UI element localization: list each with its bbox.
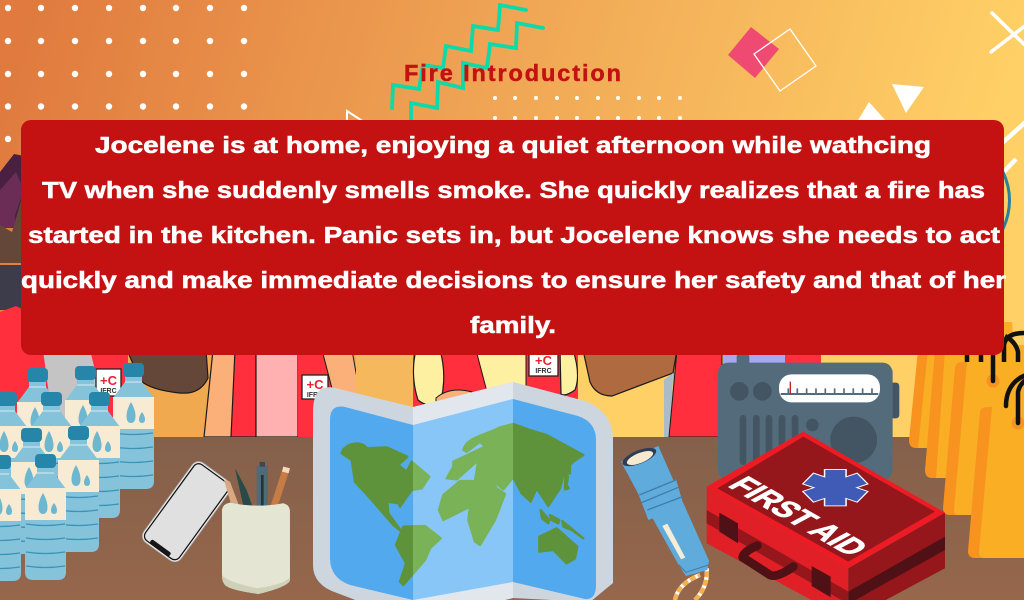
red vest xyxy=(231,350,256,437)
lavender phone xyxy=(723,350,785,364)
red cross tag two: +C xyxy=(307,377,324,392)
grey sliver xyxy=(664,373,673,437)
character at left edge xyxy=(0,154,24,360)
red vest two xyxy=(298,350,345,437)
radio xyxy=(718,353,899,480)
red cross tag three: +C xyxy=(535,353,553,368)
shirt left xyxy=(0,350,128,440)
white cross and diagonals xyxy=(991,13,1024,176)
teal zigzag lines xyxy=(392,5,543,124)
brown sleeve xyxy=(583,350,677,396)
body text xyxy=(21,132,1006,338)
red cross tag three xyxy=(529,350,558,376)
grey pen xyxy=(257,466,268,513)
pink diamond shapes xyxy=(728,27,816,91)
dot grid top left xyxy=(5,5,247,142)
first aid label: FIRST AID xyxy=(720,473,875,561)
dark pen xyxy=(235,468,255,513)
orange shopping bags xyxy=(909,322,1024,558)
red cross tag two xyxy=(302,375,328,399)
red cross tag one: +C xyxy=(100,373,118,388)
water bottles xyxy=(0,363,154,581)
pencil cup xyxy=(222,462,290,594)
blonde hair and red shirt xyxy=(413,350,578,410)
smartphone xyxy=(139,459,234,565)
title: Fire Introduction xyxy=(404,60,621,86)
white triangles xyxy=(857,84,924,122)
body text: quickly and make immediate decisions to ensure her safety and that of her xyxy=(21,267,1006,293)
body text: started in the kitchen. Panic sets in, but Jocelene knows she needs to act xyxy=(28,222,1000,248)
body text: Jocelene is at home, enjoying a quiet afternoon while wathcing xyxy=(95,132,931,158)
red cross tag three: IFRC xyxy=(535,368,552,375)
dark skin arm xyxy=(127,350,208,393)
teal arc xyxy=(1003,172,1010,229)
peach arm two xyxy=(322,350,360,437)
red cross tag one xyxy=(96,369,121,396)
peach arm xyxy=(204,350,236,437)
body text: TV when she suddenly smells smoke. She quickly realizes that a fire has xyxy=(42,177,985,203)
red text panel xyxy=(21,120,1004,355)
first aid kit xyxy=(707,432,945,600)
star of life xyxy=(804,470,867,505)
cup body xyxy=(222,503,290,594)
red cross tag two: IFRC xyxy=(307,392,323,399)
body text: family. xyxy=(470,312,556,338)
outline triangle xyxy=(347,111,364,122)
small dot grid centre xyxy=(493,96,682,120)
red cross tag one: IFRC xyxy=(100,388,117,395)
people behind the table xyxy=(0,350,921,440)
red figure right xyxy=(669,350,722,437)
flashlight xyxy=(620,444,709,600)
continents xyxy=(342,424,583,585)
table xyxy=(0,437,1024,600)
tan pencil xyxy=(224,480,241,512)
orange pencil xyxy=(269,467,290,512)
bag handles xyxy=(967,333,1024,388)
grey sleeve xyxy=(43,350,98,440)
pink shirt xyxy=(256,350,298,437)
world map xyxy=(313,382,613,600)
